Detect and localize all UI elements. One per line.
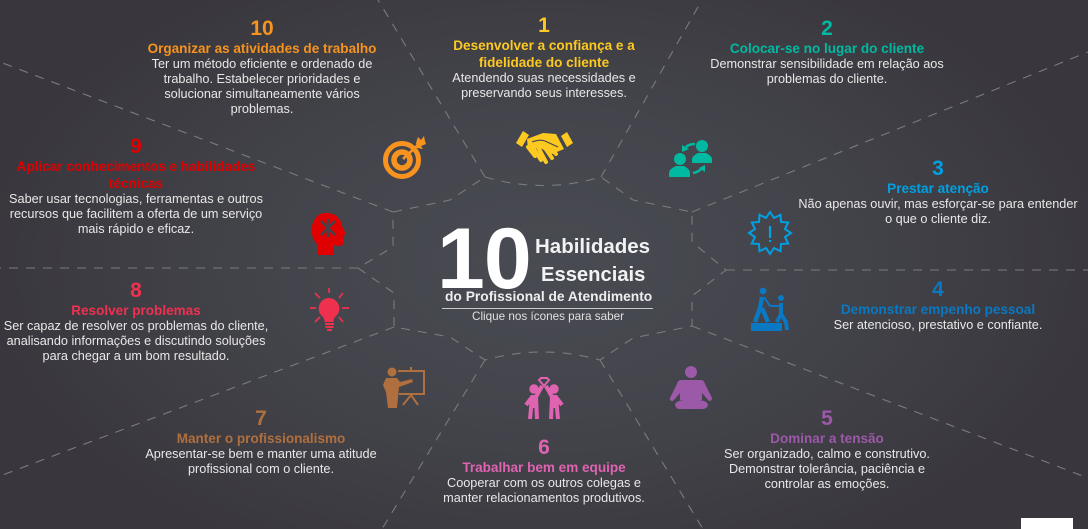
icon: helping hand — [751, 288, 787, 331]
skill 2: Colocar-se no lugar do cliente — [730, 41, 924, 56]
skill 10: problemas. — [231, 102, 293, 116]
skill 9: 9 — [130, 135, 142, 158]
skill 9: Aplicar conhecimentos e habilidades — [17, 159, 255, 174]
skill 4: 4 — [932, 278, 944, 301]
skill 5: 5 — [821, 407, 833, 430]
white corner box — [1021, 518, 1073, 529]
icon: meditation — [670, 366, 712, 409]
skill 5: Ser organizado, calmo e construtivo. — [724, 447, 930, 461]
subheading: do Profissional de Atendimento — [445, 289, 652, 304]
skill 6: Cooperar com os outros colegas e — [447, 476, 641, 490]
skill 5 — [724, 407, 930, 491]
skill 2: Demonstrar sensibilidade em relação aos — [710, 57, 944, 71]
heading: Essenciais: Essenciais — [541, 264, 645, 286]
skill 7 — [145, 407, 377, 476]
skill 1: fidelidade do cliente — [479, 55, 609, 70]
skill 2: problemas do cliente. — [767, 72, 887, 86]
rule — [442, 308, 653, 309]
skill 1: Desenvolver a confiança e a — [453, 38, 635, 53]
skill 10: Ter um método eficiente e ordenado de — [152, 57, 372, 71]
skill 5: Demonstrar tolerância, paciência e — [729, 462, 925, 476]
skill 3: o que o cliente diz. — [885, 212, 991, 226]
skill 2: 2 — [821, 17, 833, 40]
skill 10: Organizar as atividades de trabalho — [148, 41, 376, 56]
skill 1 — [452, 14, 636, 100]
heading: Habilidades: Habilidades — [535, 235, 650, 258]
skill 4: Ser atencioso, prestativo e confiante. — [834, 318, 1042, 332]
skill 3 — [798, 157, 1078, 226]
skill 9: técnicas — [109, 176, 163, 191]
skill 1: preservando seus interesses. — [461, 86, 627, 100]
skill 5: Dominar a tensão — [770, 431, 884, 446]
skill 4: Demonstrar empenho pessoal — [841, 302, 1035, 317]
skill 10: 10 — [250, 17, 274, 40]
icon: light bulb — [310, 288, 349, 330]
skill 10: solucionar simultaneamente vários — [164, 87, 360, 101]
skill 1: Atendendo suas necessidades e — [452, 71, 636, 85]
skill 8: 8 — [130, 279, 142, 302]
skill 3: Não apenas ouvir, mas esforçar-se para entender — [798, 197, 1078, 211]
skill 7: 7 — [255, 407, 267, 430]
skill 9 — [9, 135, 263, 236]
big number 10: 10 — [437, 211, 531, 307]
skill 7: Apresentar-se bem e manter uma atitude — [145, 447, 377, 461]
skill 9: mais rápido e eficaz. — [78, 222, 194, 236]
icon: head with tools — [312, 213, 346, 255]
skill 5: controlar as emoções. — [765, 477, 889, 491]
skill 9: Saber usar tecnologias, ferramentas e outros — [9, 192, 263, 206]
skill 8: Resolver problemas — [71, 303, 201, 318]
center title — [437, 211, 653, 323]
skill 6: 6 — [538, 436, 550, 459]
skill 8: analisando informações e discutindo soluções — [7, 334, 265, 348]
skill 3: Prestar atenção — [887, 181, 989, 196]
icon: target with arrow — [386, 136, 426, 176]
skill 9: recursos que facilitem a oferta de um serviço — [10, 207, 262, 221]
instruction: Clique nos ícones para saber — [472, 310, 624, 323]
skill 6: Trabalhar bem em equipe — [462, 460, 626, 475]
skill 1: 1 — [538, 14, 550, 37]
skill 6: manter relacionamentos produtivos. — [443, 491, 645, 505]
skill 6 — [443, 436, 645, 505]
skill 4 — [834, 278, 1042, 332]
skill 2 — [710, 17, 944, 86]
icon: team with raised hands — [526, 378, 562, 419]
skill 3: 3 — [932, 157, 944, 180]
icon: presenter with board — [383, 367, 425, 408]
skill 8: para chegar a um bom resultado. — [43, 349, 229, 363]
skill 8: Ser capaz de resolver os problemas do cliente, — [4, 319, 268, 333]
icon: handshake — [516, 131, 573, 162]
skill 7: Manter o profissionalismo — [177, 431, 345, 446]
icon: people exchanging places — [669, 140, 712, 177]
skill 7: profissional com o cliente. — [188, 462, 334, 476]
skill 8 — [4, 279, 268, 363]
icon: attention starburst — [749, 212, 791, 254]
skill 10: trabalho. Estabelecer prioridades e — [164, 72, 360, 86]
skill 10 — [148, 17, 376, 116]
